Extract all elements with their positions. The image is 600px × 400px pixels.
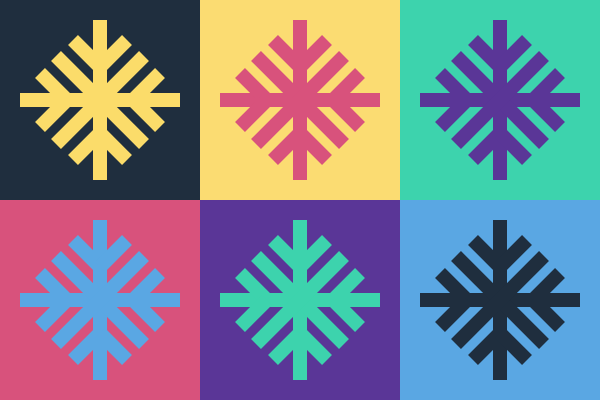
icon: yellow snowflake [20,20,180,180]
icon: blue snowflake [20,220,180,380]
panel: blue with navy snowflake [400,200,600,400]
panel: yellow with pink snowflake [200,0,400,200]
icon: purple snowflake [420,20,580,180]
icon: teal snowflake [220,220,380,380]
panel: teal with purple snowflake [400,0,600,200]
icon: pink snowflake [220,20,380,180]
panel: pink with blue snowflake [0,200,200,400]
panel: purple with teal snowflake [200,200,400,400]
panel: navy with yellow snowflake [0,0,200,200]
icon: navy snowflake [420,220,580,380]
